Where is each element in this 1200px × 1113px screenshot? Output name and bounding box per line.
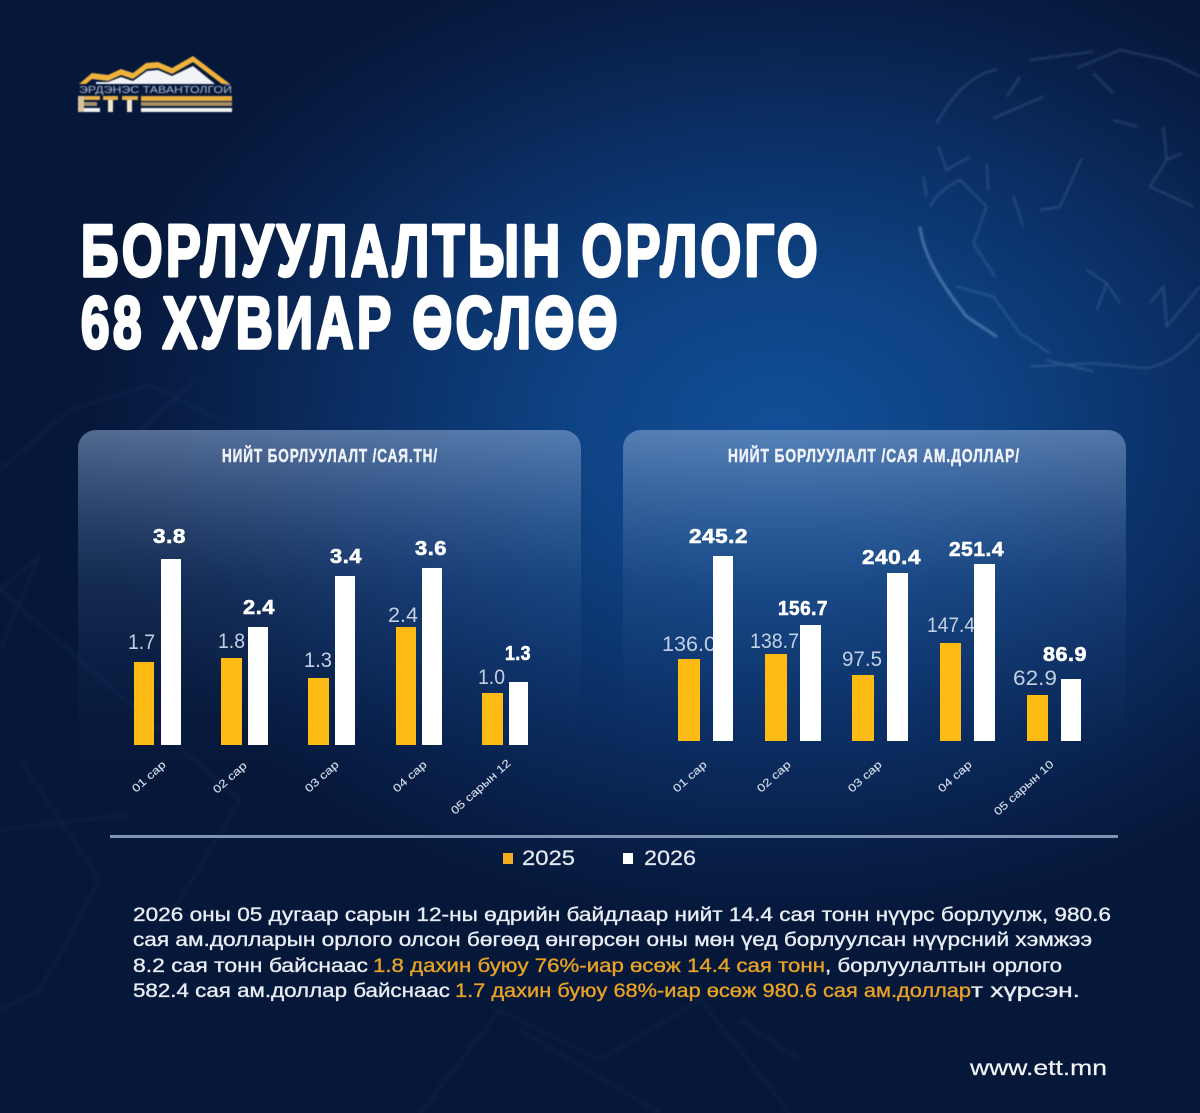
summary text: т хүрсэн.	[971, 980, 1080, 1002]
lower left network decoration	[0, 380, 800, 1113]
bar chart: 02 сар	[755, 759, 793, 795]
bar chart: 62.9	[1013, 667, 1057, 690]
title	[81, 211, 821, 364]
bar chart: 01 сар	[671, 759, 709, 795]
summary text: 582.4 сая ам.доллар байснаас	[133, 980, 450, 1002]
legend: 2025: 2025	[522, 847, 575, 870]
chart heading: НИЙТ БОРЛУУЛАЛТ /САЯ АМ.ДОЛЛАР/	[728, 445, 1020, 466]
bar chart: 245.2	[689, 526, 748, 548]
bar chart: 240.4	[862, 547, 921, 569]
bar chart: 86.9	[1043, 644, 1087, 666]
summary text: сая ам.долларын орлого олсон бөгөөд өнгөрсөн оны мөн үед борлуулсан нүүрсний хэмжээ	[133, 929, 1092, 951]
bar chart: 1.3	[505, 643, 531, 665]
bar chart: 97.5	[842, 648, 882, 671]
title: БОРЛУУЛАЛТЫН ОРЛОГО	[81, 211, 821, 292]
bar chart: 147.4	[927, 614, 975, 637]
summary text: , борлуулалтын орлого	[825, 955, 1062, 977]
legend: 2025	[503, 847, 575, 870]
bar chart: 2.4	[243, 597, 275, 619]
bar chart: 02 сар	[211, 760, 249, 796]
bar chart: 3.6	[415, 538, 447, 560]
legend: 2026: 2026	[644, 847, 696, 870]
panel background	[623, 430, 1126, 775]
bar chart: 03 сар	[846, 759, 884, 795]
bar chart: 156.7	[778, 598, 828, 620]
logo: organisation name: ЭРДЭНЭС ТАВАНТОЛГОЙ	[79, 83, 232, 96]
bar chart: 04 сар	[936, 759, 974, 795]
bar chart: 03 сар	[303, 759, 341, 795]
logo	[78, 56, 232, 112]
website: www.ett.mn	[969, 1057, 1107, 1080]
bar chart: 3.8	[153, 526, 186, 548]
bar chart	[662, 526, 1087, 818]
bar chart: 251.4	[949, 539, 1004, 561]
summary text: 8.2 сая тонн байснаас	[133, 955, 368, 977]
bar chart: 2.4	[388, 604, 418, 627]
legend	[503, 847, 696, 870]
summary text	[133, 904, 1111, 1002]
globe network decoration	[920, 50, 1200, 372]
bar chart	[128, 526, 531, 817]
summary text: 1.7 дахин буюу 68%-иар өсөж 980.6 сая ам.доллар	[455, 980, 971, 1002]
bar chart: 1.3	[304, 649, 332, 672]
bar chart: 1.8	[218, 630, 245, 653]
bar chart: 01 сар	[130, 759, 168, 795]
bar chart: 136.0	[662, 633, 716, 656]
logo: mountains	[79, 56, 230, 84]
bar chart: 1.0	[478, 666, 505, 689]
legend: 2026	[623, 847, 696, 870]
bar chart: 3.4	[330, 546, 362, 568]
bar chart: 1.7	[128, 631, 155, 654]
panel: sales in million tons	[78, 430, 581, 817]
bar chart: 05 сарын 12	[449, 757, 513, 817]
panel: sales in million US dollars	[623, 430, 1126, 818]
summary text: 2026 оны 05 дугаар сарын 12-ны өдрийн байдлаар нийт 14.4 сая тонн нүүрс борлуулж, 980.6	[133, 904, 1111, 926]
logo: ETT stripes	[78, 96, 232, 112]
bar chart: 138.7	[750, 630, 799, 653]
summary text: 1.8 дахин буюу 76%-иар өсөж 14.4 сая тонн	[373, 955, 825, 977]
chart heading: НИЙТ БОРЛУУЛАЛТ /САЯ.ТН/	[222, 445, 438, 466]
title: 68 ХУВИАР ӨСЛӨӨ	[81, 283, 621, 364]
panel background	[78, 430, 581, 775]
bar chart: 04 сар	[391, 759, 429, 795]
bar chart: 05 сарын 10	[992, 758, 1056, 818]
